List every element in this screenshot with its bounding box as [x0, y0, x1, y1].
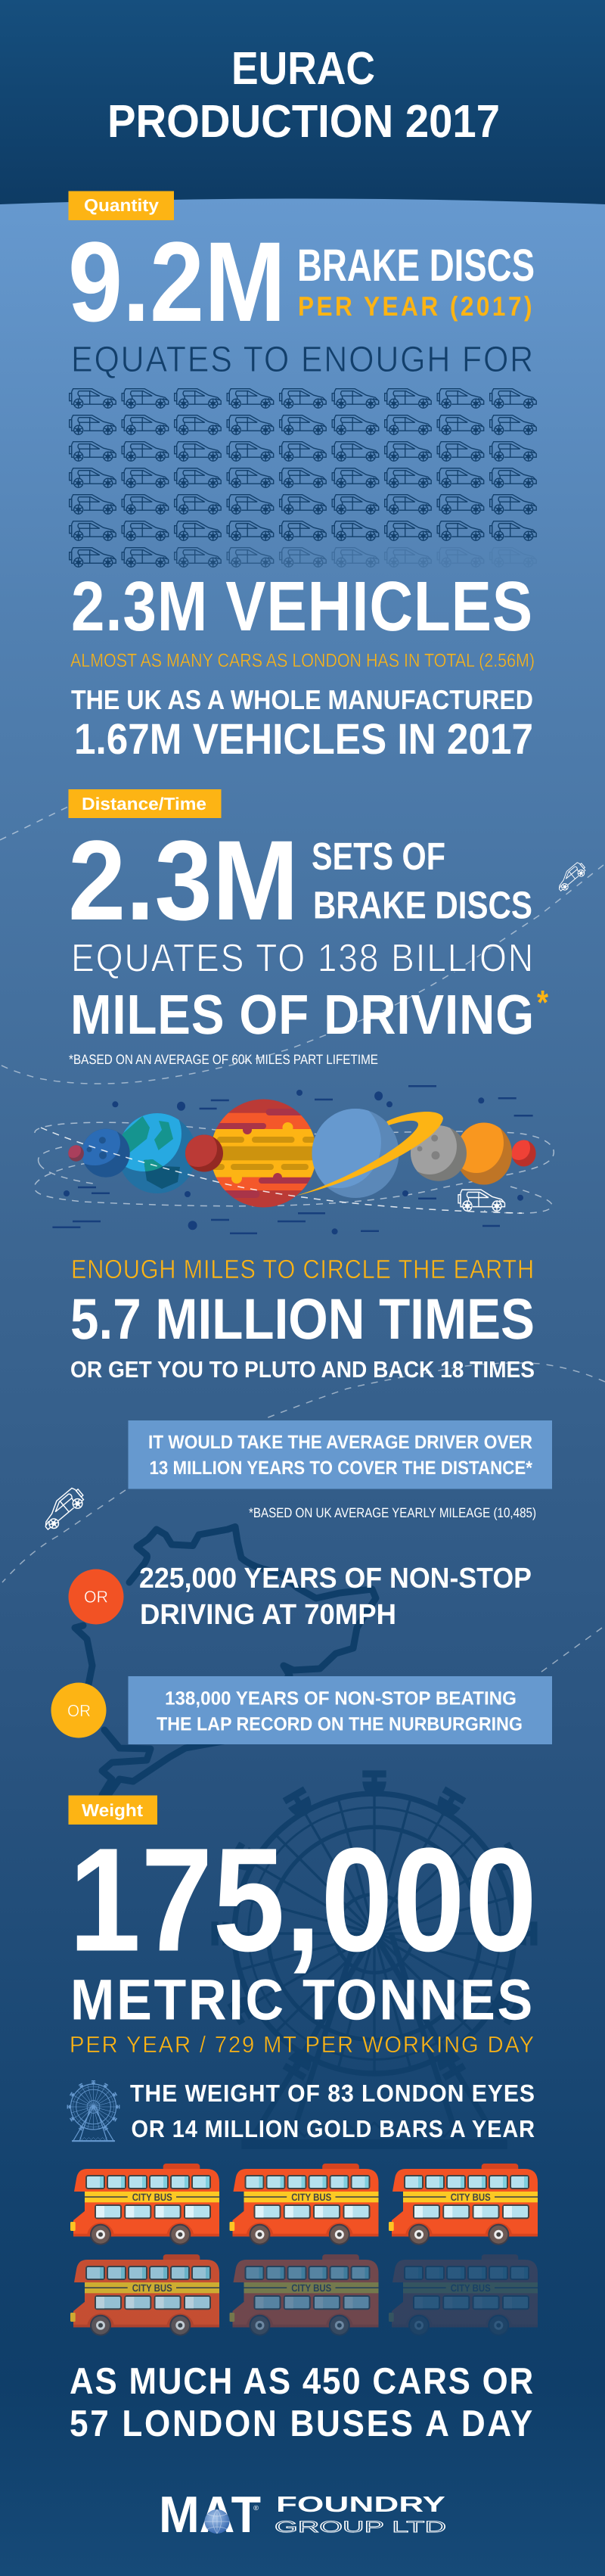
icon grid: cars	[70, 389, 536, 567]
text: circle the earth: ENOUGH MILES TO CIRCLE THE EARTH	[71, 1255, 535, 1284]
background london eye	[212, 1771, 537, 2149]
icon: london eye	[67, 2080, 119, 2142]
icon: car on dashed route top right	[554, 860, 588, 893]
planet: grey moon	[411, 1125, 467, 1181]
badge: OR red	[68, 1570, 124, 1624]
tag: Distance/Time: Distance/Time	[82, 794, 206, 814]
text: uk manufacture: 1.67M VEHICLES IN 2017	[74, 715, 533, 764]
tag: Quantity: Quantity	[84, 195, 159, 215]
text: cars and buses a day: AS MUCH AS 450 CARS OR	[70, 2361, 535, 2402]
tag: Quantity	[68, 191, 174, 220]
space debris dashes and dots	[52, 1085, 533, 1234]
bus 5	[230, 2254, 378, 2336]
text: london eyes and gold bars: THE WEIGHT OF 83 LONDON EYES	[130, 2080, 535, 2107]
callout: 13 million years: 13 MILLION YEARS TO COVER THE DISTANCE*	[150, 1458, 532, 1479]
planet: blue moon	[82, 1129, 130, 1178]
panel: quantity	[68, 191, 536, 764]
badge: OR red: OR	[84, 1588, 108, 1606]
text: london eyes and gold bars: OR 14 MILLION GOLD BARS A YEAR	[132, 2115, 535, 2142]
big number: 9.2M brake discs: 9.2M	[68, 218, 286, 345]
tag: Distance/Time	[68, 789, 221, 818]
logo: MAT Foundry Group: GROUP LTD	[275, 2518, 446, 2536]
logo: MAT Foundry Group: FOUNDRY	[276, 2493, 445, 2517]
planet: orange	[461, 1123, 512, 1185]
callout: 13 million years	[129, 1420, 552, 1489]
bus 3: CITY BUS	[451, 2192, 491, 2203]
bus 6: CITY BUS	[451, 2282, 491, 2294]
text: miles of driving: MILES OF DRIVING	[70, 983, 535, 1046]
bus 1	[70, 2164, 219, 2245]
planet: saturn	[312, 1109, 399, 1198]
big number: 2.3M sets of brake discs: SETS OF	[312, 835, 445, 878]
orbits behind planets	[34, 1122, 554, 1213]
big text: metric tonnes: METRIC TONNES	[70, 1968, 535, 2033]
icon grid: buses	[70, 2164, 538, 2336]
big number: 9.2M brake discs: BRAKE DISCS	[297, 240, 535, 291]
planet: small maroon	[68, 1145, 84, 1162]
logo: MAT Foundry Group: ®	[253, 2504, 259, 2512]
big number: 2.3M sets of brake discs	[68, 817, 532, 944]
text: uk manufacture	[71, 684, 533, 764]
text: per year: PER YEAR / 729 MT PER WORKING DAY	[70, 2032, 535, 2058]
illustration: planets	[34, 1085, 554, 1234]
big number: 9.2M brake discs	[68, 218, 535, 345]
logo: MAT Foundry Group	[159, 2486, 446, 2543]
panel: distance and time	[34, 789, 588, 1795]
planet: small red	[511, 1140, 536, 1167]
tag: Weight	[68, 1795, 157, 1825]
planet: jupiter	[213, 1099, 315, 1208]
header background	[0, 0, 605, 227]
logo: MAT Foundry Group: MAT	[159, 2486, 261, 2543]
callout: 138,000 years	[129, 1676, 552, 1744]
bus 2: CITY BUS	[291, 2192, 331, 2203]
big number: 2.3M sets of brake discs: BRAKE DISCS	[313, 884, 532, 926]
planet: red behind earth	[185, 1135, 223, 1171]
text: london eyes and gold bars	[130, 2080, 535, 2142]
icon: car on dashed route left	[38, 1486, 88, 1532]
bus 1: CITY BUS	[132, 2192, 172, 2203]
tag: Weight: Weight	[82, 1800, 143, 1820]
badge: OR yellow	[51, 1683, 106, 1738]
text: cars and buses a day	[70, 2361, 535, 2444]
panel: weight	[67, 1771, 538, 2444]
text: miles of driving: *	[537, 983, 548, 1022]
text: uk manufacture: THE UK AS A WHOLE MANUFACTURED	[71, 684, 533, 715]
big number: 9.2M brake discs: PER YEAR (2017)	[298, 291, 535, 322]
big number: 175,000: 175,000	[69, 1818, 537, 1983]
big text: 2.3M vehicles: 2.3M VEHICLES	[71, 567, 533, 646]
bus 4	[70, 2254, 219, 2336]
badge: OR yellow: OR	[67, 1701, 91, 1720]
title: EURAC	[231, 42, 375, 94]
bus 5: CITY BUS	[291, 2282, 331, 2294]
callout: 138,000 years: 138,000 YEARS OF NON-STOP BEATING	[165, 1688, 517, 1709]
title: PRODUCTION 2017	[107, 95, 500, 147]
bus 6	[389, 2254, 538, 2336]
text: london comparison: ALMOST AS MANY CARS AS LONDON HAS IN TOTAL (2.56M)	[70, 650, 535, 671]
bus 3	[389, 2164, 538, 2245]
bus 2	[230, 2164, 378, 2245]
title	[107, 42, 500, 147]
big text: 5.7 million times: 5.7 MILLION TIMES	[70, 1287, 535, 1352]
text: 225,000 years	[139, 1563, 532, 1631]
text: 225,000 years: 225,000 YEARS OF NON-STOP	[139, 1563, 532, 1594]
big number: 2.3M sets of brake discs: 2.3M	[68, 817, 299, 944]
text: pluto: OR GET YOU TO PLUTO AND BACK 18 TIMES	[70, 1357, 535, 1383]
planet: earth	[123, 1113, 194, 1193]
nurburgring track	[75, 1527, 376, 1795]
saturn ring	[296, 1112, 443, 1196]
text: cars and buses a day: 57 LONDON BUSES A DAY	[70, 2403, 535, 2444]
callout: 138,000 years: THE LAP RECORD ON THE NURBURGRING	[157, 1713, 523, 1734]
footnote: part lifetime: *BASED ON AN AVERAGE OF 60K MILES PART LIFETIME	[69, 1052, 378, 1067]
text: equates to 138 billion: EQUATES TO 138 BILLION	[71, 937, 535, 981]
callout: 13 million years: IT WOULD TAKE THE AVERAGE DRIVER OVER	[148, 1432, 532, 1453]
bus 4: CITY BUS	[132, 2282, 172, 2294]
footnote: yearly mileage: *BASED ON UK AVERAGE YEARLY MILEAGE (10,485)	[249, 1505, 536, 1520]
text: 225,000 years: DRIVING AT 70MPH	[140, 1599, 396, 1631]
orbit in front of planets	[41, 1128, 522, 1213]
icon: car in orbit	[458, 1190, 505, 1211]
text: equates to enough for: EQUATES TO ENOUGH FOR	[71, 340, 535, 380]
